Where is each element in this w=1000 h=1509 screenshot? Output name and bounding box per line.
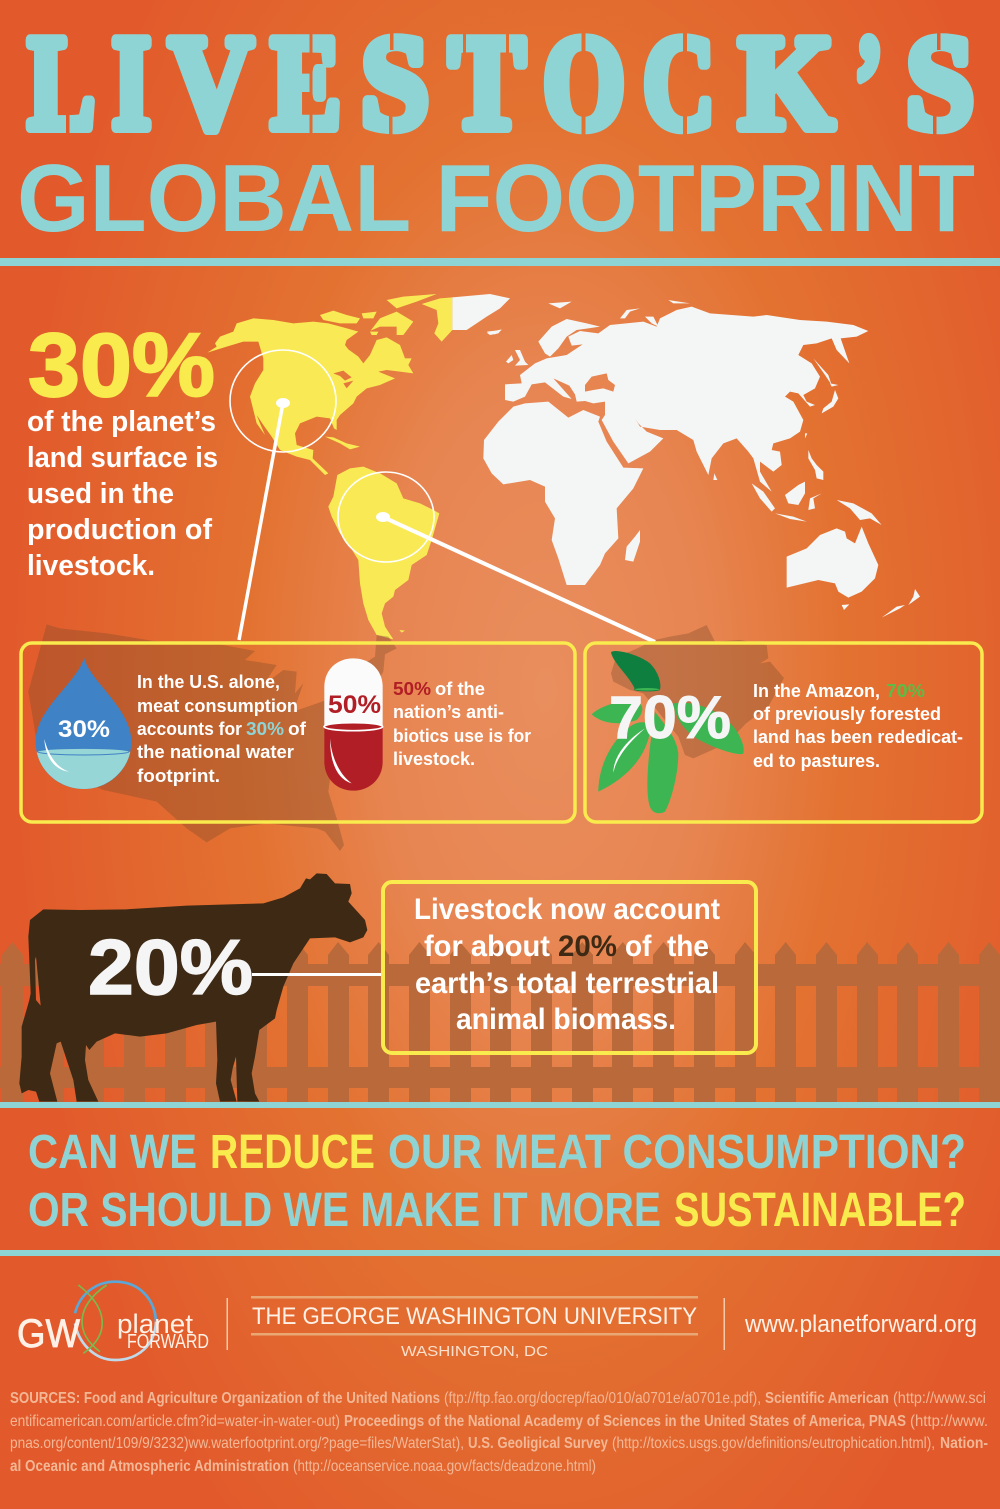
sources: (http://www.sci xyxy=(893,1390,986,1407)
title: Livestock's: O xyxy=(543,8,625,156)
world map xyxy=(207,294,920,639)
text: water footprint: of xyxy=(288,718,307,739)
sources: pnas.org/content/109/9/3232)ww.waterfootprint.org/?page=files/WaterStat), xyxy=(10,1435,464,1452)
map: North and South America xyxy=(207,294,452,639)
text: water footprint: accounts for xyxy=(137,718,242,739)
divider xyxy=(226,1298,228,1350)
callout circle: Brazil xyxy=(338,472,434,562)
callout: biomass: 20% xyxy=(558,930,617,963)
text: Amazon: land has been rededicat- xyxy=(753,726,963,747)
sources: SOURCES: Food and Agriculture Organization of the United Nations xyxy=(10,1390,440,1407)
stat: 30 percent land xyxy=(27,316,218,582)
text: antibiotics xyxy=(393,678,531,769)
cow silhouette xyxy=(19,873,367,1102)
panel: Amazon xyxy=(585,643,982,822)
text: antibiotics: of the xyxy=(435,678,485,699)
stat: 30 percent land: of the planet’s xyxy=(27,406,216,438)
logo: George Washington University: WASHINGTON, DC xyxy=(401,1343,548,1360)
title: Livestock's: C xyxy=(643,8,715,156)
title: Global Footprint: GLOBAL FOOTPRINT xyxy=(17,145,975,252)
title: Livestock's: V xyxy=(169,8,253,156)
text: Amazon: ed to pastures. xyxy=(753,750,880,771)
title: Livestock's: T xyxy=(449,8,525,156)
title: Livestock's: L xyxy=(28,8,95,156)
sources: (ftp://ftp.fao.org/docrep/fao/010/a0701e/a0701e.pdf), xyxy=(444,1390,761,1407)
pointer: Brazil to Amazon panel xyxy=(376,512,655,642)
divider xyxy=(724,1298,725,1350)
sources: (http://oceanservice.noaa.gov/facts/deadzone.html) xyxy=(293,1458,596,1475)
text: water footprint: meat consumption xyxy=(137,695,298,716)
question banner: OR SHOULD WE MAKE IT MORE xyxy=(28,1184,661,1237)
pointer: United States to water panel xyxy=(239,398,290,640)
background silhouette: United States xyxy=(28,624,397,851)
logo: GW Planet Forward: FORWARD xyxy=(127,1331,209,1353)
icon: antibiotic pill: 50% xyxy=(328,691,381,719)
icon: water drop: 30% xyxy=(58,716,110,743)
stat: 30 percent land: 30% xyxy=(28,316,215,416)
title: Livestock's: I xyxy=(112,8,151,156)
question banner: CAN WE xyxy=(28,1126,197,1179)
icon: leaves with 70 percent xyxy=(592,651,744,813)
title: Livestock's: E xyxy=(271,8,341,156)
text: water footprint: footprint. xyxy=(137,765,220,786)
logo: GW Planet Forward xyxy=(17,1282,209,1360)
rule xyxy=(0,1102,1000,1108)
sources: (http://toxics.usgs.gov/definitions/eutrophication.html), xyxy=(612,1435,935,1452)
sources: Proceedings of the National Academy of Sciences in the United States of America, PNAS xyxy=(344,1413,906,1430)
text: antibiotics: nation’s anti- xyxy=(393,701,504,722)
rule xyxy=(0,258,1000,266)
question banner xyxy=(28,1126,966,1237)
background silhouette: Amazon region xyxy=(611,625,784,758)
connector line xyxy=(252,973,384,976)
fence xyxy=(0,942,1000,1102)
logo: GW Planet Forward: GW xyxy=(17,1312,80,1356)
title stencil bridges xyxy=(66,22,940,142)
rule xyxy=(0,1250,1000,1256)
website: www.planetforward.org xyxy=(744,1311,977,1338)
callout: biomass: for about xyxy=(424,930,550,963)
callout: biomass: Livestock now account xyxy=(414,893,720,926)
callout: biomass: of the xyxy=(625,930,709,963)
stat: 30 percent land: land surface is xyxy=(27,442,218,474)
title: Livestock's: S xyxy=(906,8,974,156)
panel: U.S. water and antibiotics xyxy=(21,643,575,822)
logo: George Washington University xyxy=(251,1296,698,1360)
text: antibiotics: livestock. xyxy=(393,748,475,769)
callout: biomass xyxy=(383,882,756,1053)
stat: 30 percent land: used in the xyxy=(27,478,174,510)
map: Greenland and Iceland xyxy=(452,294,510,335)
icon: water drop xyxy=(36,658,131,789)
sources: U.S. Geoligical Survey xyxy=(468,1435,608,1452)
callout: biomass: earth’s total terrestrial xyxy=(415,967,719,1000)
text: water footprint xyxy=(137,671,307,786)
text: Amazon xyxy=(753,680,963,771)
text: Amazon: 70% xyxy=(886,680,925,701)
sources: Scientific American xyxy=(765,1390,889,1407)
sources: Nation- xyxy=(940,1435,988,1452)
title: Livestock's: ’ xyxy=(855,8,883,156)
stat: 30 percent land: livestock. xyxy=(27,550,155,582)
callout circle: United States xyxy=(230,350,336,452)
sources: (http://www. xyxy=(910,1413,988,1430)
question banner: REDUCE xyxy=(210,1126,375,1179)
callout: biomass: animal biomass. xyxy=(456,1003,676,1036)
text: antibiotics: biotics use is for xyxy=(393,725,531,746)
text: Amazon: In the Amazon, xyxy=(753,680,880,701)
text: water footprint: In the U.S. alone, xyxy=(137,671,280,692)
icon: leaves with 70 percent: 70% xyxy=(609,684,731,751)
sources: entificamerican.com/article.cfm?id=water-in-water-out) xyxy=(10,1413,340,1430)
text: antibiotics: 50% xyxy=(393,678,431,699)
logo: GW Planet Forward: planet xyxy=(117,1309,194,1339)
text: water footprint: the national water xyxy=(137,741,294,762)
map: Eurasia, Africa and Oceania xyxy=(483,300,920,618)
text: Amazon: of previously forested xyxy=(753,703,941,724)
title: Livestock's xyxy=(28,8,974,156)
title: Livestock's: K xyxy=(739,8,834,156)
stat: 30 percent land: production of xyxy=(27,514,212,546)
icon: antibiotic pill xyxy=(324,658,383,791)
sources xyxy=(10,1390,988,1475)
stat: 20 percent: 20% xyxy=(88,923,253,1011)
title: Livestock's: S xyxy=(361,8,429,156)
text: water footprint: 30% xyxy=(246,718,284,739)
sources: al Oceanic and Atmospheric Administration xyxy=(10,1458,289,1475)
logo: George Washington University: THE GEORGE WASHINGTON UNIVERSITY xyxy=(252,1303,697,1330)
